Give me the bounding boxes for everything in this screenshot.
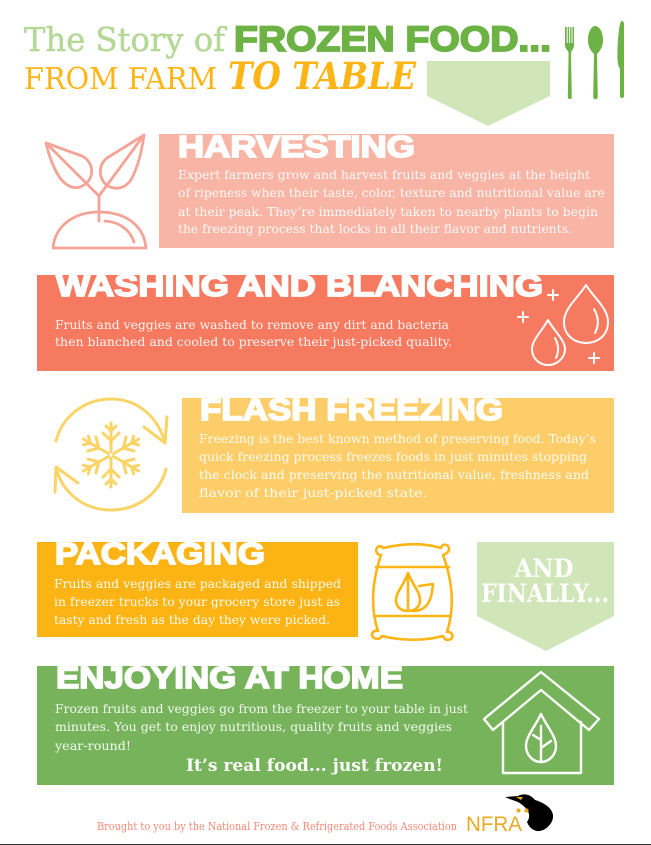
heading: packaging: PACKAGING bbox=[55, 536, 265, 571]
text: enjoying at home bbox=[54, 701, 468, 753]
heading: harvesting: HARVESTING bbox=[178, 129, 415, 164]
title bbox=[24, 20, 551, 98]
text: harvesting: at their peak. They’re immediately taken to nearby plants to begin bbox=[178, 204, 598, 219]
text: flash freezing: quick freezing process freezes foods in just minutes stopping bbox=[199, 449, 587, 464]
arrow: and finally: AND bbox=[514, 554, 574, 583]
text: harvesting: Expert farmers grow and harvest fruits and veggies at the height bbox=[178, 167, 590, 182]
arrow: and finally: FINALLY... bbox=[481, 579, 609, 608]
icon: house with leaf bbox=[484, 672, 599, 773]
text: enjoying at home: year-round! bbox=[54, 738, 131, 753]
heading: enjoying at home: ENJOYING AT HOME bbox=[56, 660, 403, 695]
text: flash freezing bbox=[199, 431, 596, 500]
logo: NFRA: NFRA bbox=[466, 813, 522, 836]
text: washing and blanching bbox=[55, 317, 452, 349]
heading: flash freezing: FLASH FREEZING bbox=[200, 392, 503, 427]
text: flash freezing: Freezing is the best known method of preserving food. Today’s bbox=[199, 431, 596, 446]
icon: freeze cycle bbox=[55, 399, 167, 510]
text: enjoying at home: Frozen fruits and veggies go from the freezer to your table in just bbox=[55, 701, 468, 716]
logo: NFRA bbox=[466, 794, 553, 836]
text: harvesting: the freezing process that locks in all their flavor and nutrients. bbox=[178, 221, 572, 236]
title: TO TABLE bbox=[228, 54, 417, 98]
panel: flash freezing bbox=[182, 392, 614, 513]
icon: sprout bbox=[46, 135, 146, 248]
icon: water drops bbox=[518, 285, 608, 365]
arrow: header bbox=[427, 61, 550, 126]
arrow: and finally bbox=[477, 542, 614, 651]
text: flash freezing: the clock and preserving the nutritional value, freshness and bbox=[199, 467, 589, 482]
text: packaging: tasty and fresh as the day they were picked. bbox=[54, 612, 330, 627]
title: The Story of bbox=[24, 20, 228, 59]
text: washing and blanching: then blanched and cooled to preserve their just-picked quality. bbox=[55, 334, 452, 349]
footer credit: Brought to you by the National Frozen & Refrigerated Foods Association bbox=[97, 819, 457, 833]
text: washing and blanching: Fruits and veggies are washed to remove any dirt and bacteria bbox=[55, 317, 450, 332]
heading: washing and blanching: WASHING AND BLANCHING bbox=[56, 268, 543, 303]
text: packaging: Fruits and veggies are packaged and shipped bbox=[54, 576, 341, 591]
panel: washing and blanching bbox=[37, 268, 614, 371]
text: harvesting: of ripeness when their taste, color, texture and nutritional value are bbox=[178, 185, 605, 200]
title: FROZEN FOOD... bbox=[234, 20, 551, 59]
text: flash freezing: flavor of their just-picked state. bbox=[199, 485, 427, 500]
icon: food sack bbox=[372, 544, 452, 640]
panel: harvesting bbox=[159, 129, 614, 248]
text: enjoying at home: minutes. You get to enjoy nutritious, quality fruits and veggies bbox=[55, 719, 452, 734]
panel: enjoying at home bbox=[37, 660, 614, 785]
text: packaging bbox=[54, 576, 341, 627]
tagline: It’s real food... just frozen! bbox=[186, 756, 443, 776]
panel: packaging bbox=[37, 536, 358, 637]
text: harvesting bbox=[178, 167, 605, 236]
title: FROM FARM bbox=[24, 62, 217, 97]
text: packaging: in freezer trucks to your grocery store just as bbox=[54, 594, 340, 609]
icon: cutlery bbox=[565, 21, 624, 99]
